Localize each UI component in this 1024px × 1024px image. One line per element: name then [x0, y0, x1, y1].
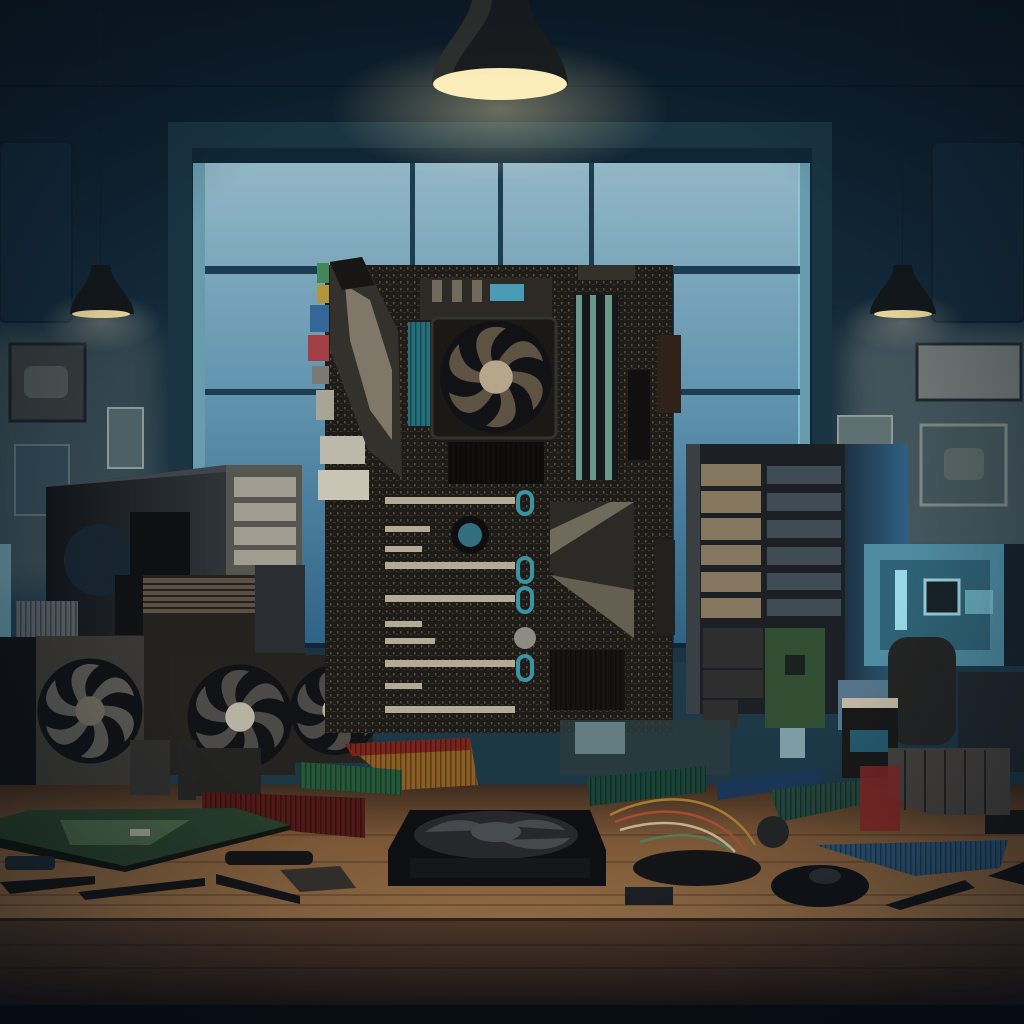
- motherboard: [308, 257, 681, 733]
- PCIe slots: [385, 497, 515, 713]
- small open case right: [864, 544, 1024, 666]
- window: [168, 122, 832, 662]
- VRM heatsink left: [330, 257, 402, 478]
- cooler fins: [448, 442, 544, 484]
- io ports: [308, 263, 369, 500]
- RAM sticks: [202, 738, 1024, 876]
- small parts on table: [0, 851, 1024, 910]
- back clutter of small parts: [130, 628, 1024, 800]
- CPU fan: [432, 318, 556, 438]
- RAM slots: [574, 295, 618, 480]
- mice: [633, 816, 869, 907]
- green circuit board: [0, 808, 290, 872]
- chipset heatsink: [550, 502, 634, 710]
- ceiling lamp: [330, 0, 670, 180]
- PSU box: [16, 565, 305, 740]
- tabletop: [0, 785, 1024, 1024]
- cables: [610, 799, 755, 852]
- center fan on table: [388, 810, 606, 886]
- top heatsink: [420, 278, 552, 320]
- left fans: [0, 636, 380, 786]
- PC case left: [0, 465, 302, 640]
- frames on wall: [10, 344, 1021, 515]
- tower case right: [686, 444, 908, 728]
- wall lamps: [41, 0, 963, 352]
